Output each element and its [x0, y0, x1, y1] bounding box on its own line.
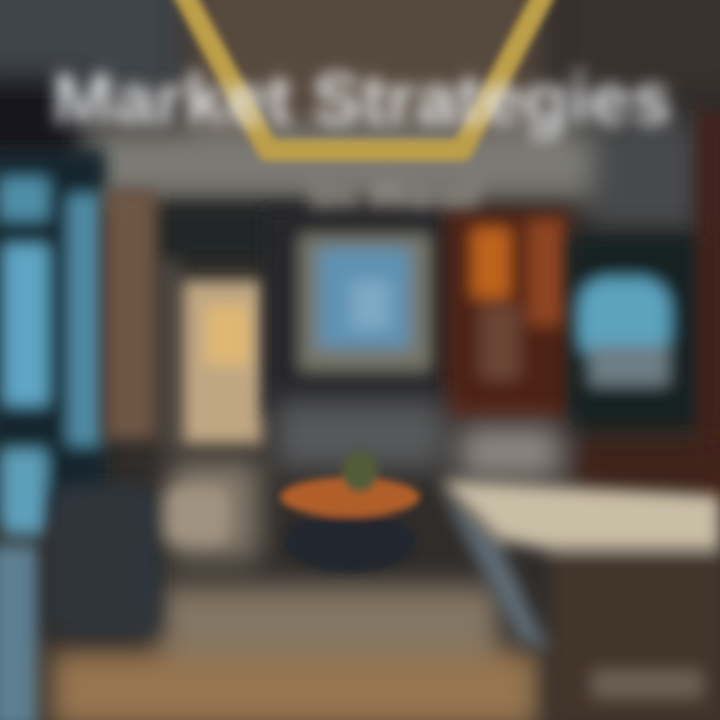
centre back wall and painting: [265, 210, 455, 415]
doorway: [182, 280, 264, 445]
left blue panels: [0, 150, 105, 720]
right sofa: [440, 480, 720, 720]
subtitle: in Real: [310, 178, 480, 216]
mid floor band: [275, 400, 720, 490]
orange wood panels: [445, 210, 570, 420]
ceiling: [0, 0, 720, 230]
coffee table with orange bowl: [280, 452, 420, 572]
ceiling beams: gold frame: [182, 0, 546, 150]
wood column: [105, 190, 305, 450]
right screen: [570, 110, 720, 510]
left armchair: [50, 485, 230, 635]
title: Market Strategies: [52, 60, 672, 140]
floor: [50, 460, 540, 720]
